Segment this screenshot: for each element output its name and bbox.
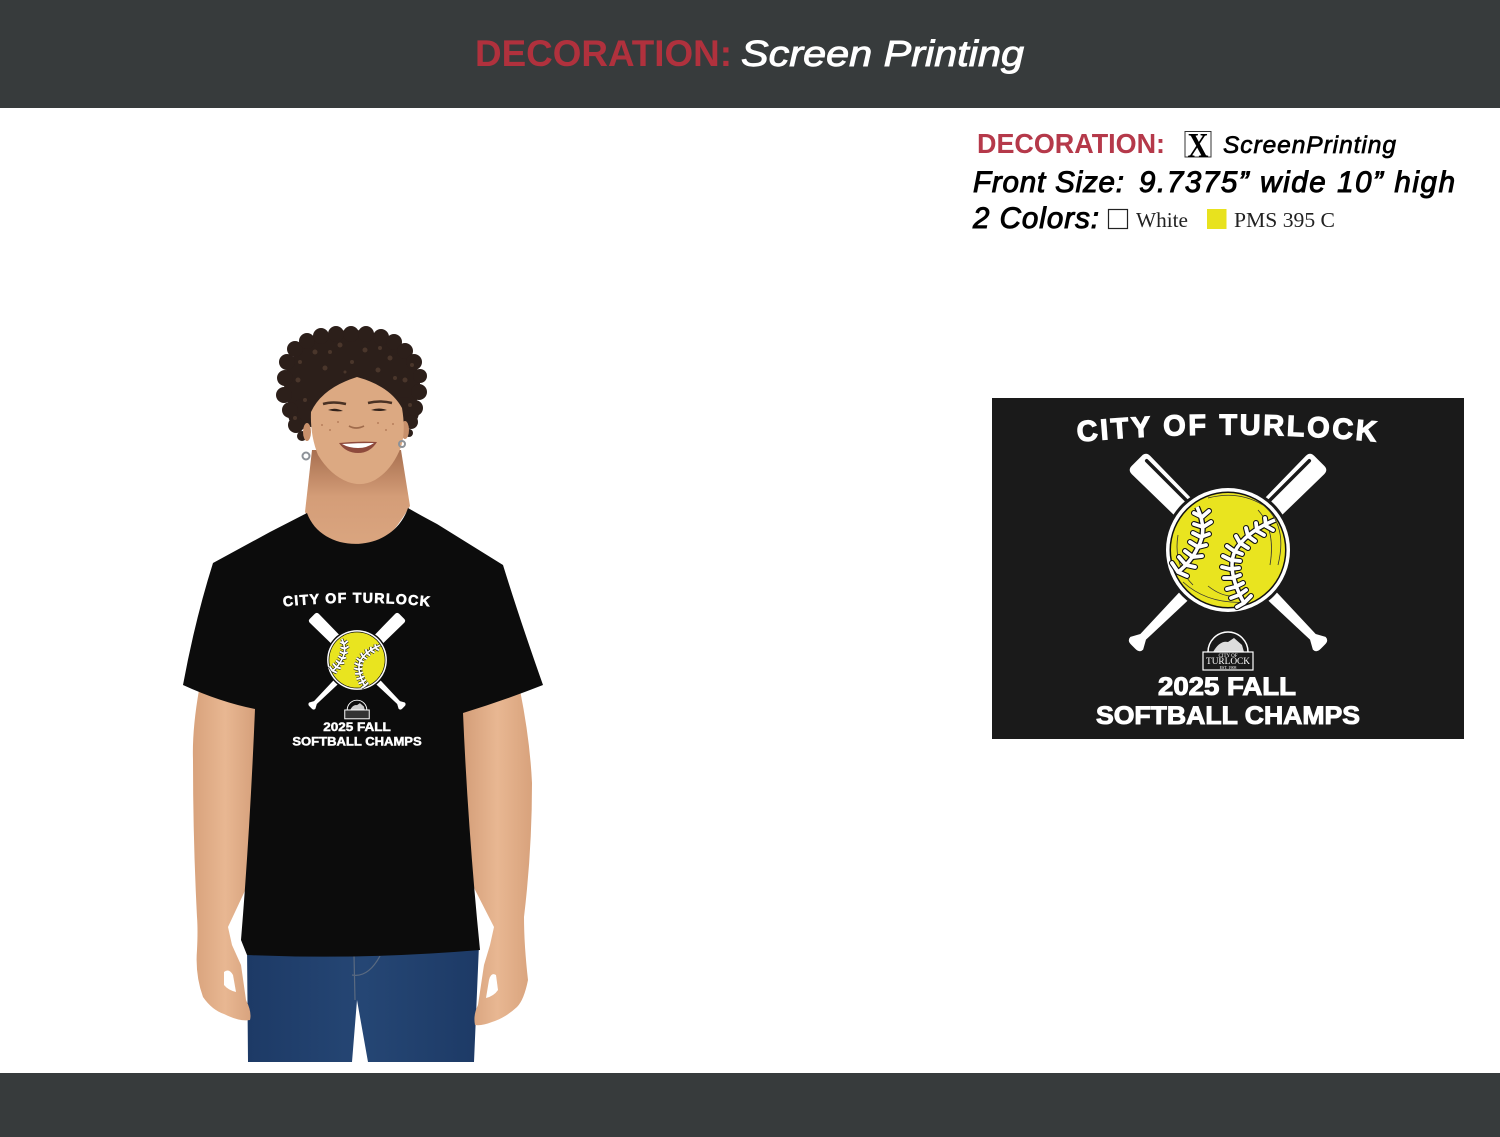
- header title: DECORATION:: [475, 33, 732, 74]
- city logo: CITY OF: [1218, 654, 1238, 659]
- header bar: [0, 0, 1500, 108]
- PMS label: PMS 395 C: [1234, 208, 1335, 232]
- artwork champs: SOFTBALL CHAMPS: [1096, 702, 1360, 730]
- print logo: [345, 700, 369, 719]
- colors label: 2 Colors:: [972, 202, 1099, 235]
- arched title: CITY OF TURLOCK: [1077, 414, 1378, 442]
- shirt print: [283, 592, 431, 748]
- neck: [305, 450, 410, 555]
- white swatch: [1108, 210, 1128, 228]
- city logo: TURLOCK: [1206, 656, 1251, 666]
- artwork panel: [992, 398, 1464, 739]
- freckles: [321, 421, 394, 431]
- footer bar: [0, 1073, 1500, 1137]
- header title: [475, 33, 1024, 74]
- header title: Screen Printing: [741, 33, 1024, 74]
- hair texture: [293, 342, 414, 420]
- front size: [973, 166, 1455, 199]
- print bats: [306, 612, 408, 712]
- screen printing label: ScreenPrinting: [1223, 132, 1396, 159]
- checked box: X: [1188, 126, 1208, 165]
- smile: [339, 442, 377, 453]
- city logo: [1203, 632, 1253, 670]
- print year: 2025 FALL: [323, 720, 391, 734]
- decoration details: [972, 126, 1455, 235]
- left hand gap: [224, 971, 236, 992]
- hair: [276, 326, 427, 441]
- bats: [1124, 452, 1332, 656]
- jeans: [247, 945, 479, 1062]
- earrings: [302, 441, 405, 460]
- front size: 9.7375” wide 10” high: [1139, 166, 1455, 199]
- print champs: SOFTBALL CHAMPS: [292, 734, 422, 748]
- eyes: [328, 408, 387, 411]
- city logo: EST. 1908: [1220, 665, 1236, 670]
- yellow swatch: [1207, 209, 1226, 229]
- print softball: [326, 629, 388, 691]
- right hand gap: [486, 974, 498, 998]
- decoration label: DECORATION:: [977, 128, 1165, 159]
- brows: [323, 402, 392, 404]
- face: [303, 377, 409, 484]
- nose: [349, 426, 364, 428]
- print title: CITY OF TURLOCK: [283, 592, 431, 607]
- model wearing shirt: [183, 326, 543, 1062]
- t-shirt: [183, 508, 543, 957]
- front size: Front Size:: [973, 166, 1124, 199]
- softball: [1163, 485, 1293, 615]
- left arm: [193, 690, 265, 1020]
- right arm: [455, 690, 532, 1025]
- white label: White: [1136, 208, 1188, 232]
- artwork year: 2025 FALL: [1158, 673, 1296, 701]
